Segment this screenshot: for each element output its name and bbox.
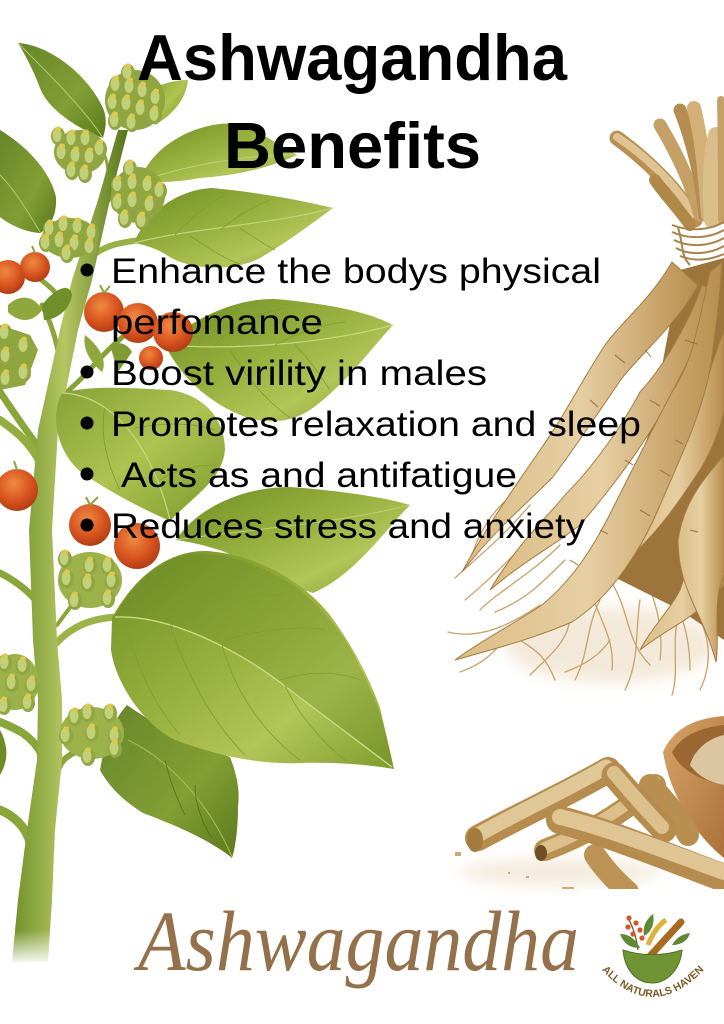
leaf: behind Benefits xyxy=(140,123,297,182)
flower cluster: middle xyxy=(58,549,122,610)
green buds below berries xyxy=(0,288,132,390)
logo icon: pestle xyxy=(650,922,681,956)
leaf: largest xyxy=(111,551,394,769)
leaf: far left xyxy=(0,130,56,233)
leaf: middle xyxy=(165,299,393,421)
logo icon: mortar bowl xyxy=(623,950,682,983)
logo icon: berries sprig xyxy=(620,914,690,950)
title xyxy=(137,21,568,182)
thin rootlets xyxy=(448,490,708,695)
flower cluster: centre xyxy=(111,159,167,230)
illustration: root bundle xyxy=(448,100,724,695)
leaf: bottom xyxy=(100,705,239,858)
white footer panel xyxy=(580,889,724,1024)
powder dust xyxy=(460,858,660,886)
stem branches xyxy=(0,145,145,842)
long roots xyxy=(455,262,724,662)
main stem xyxy=(12,130,128,962)
shaded gaps between roots xyxy=(600,258,724,640)
benefit 1: perfomance xyxy=(111,303,323,342)
title: Benefits xyxy=(224,109,481,182)
benefit 3: Promotes relaxation and sleep xyxy=(111,405,641,444)
leaf: left edge sliver xyxy=(0,730,6,775)
berries xyxy=(0,246,193,569)
root markings xyxy=(570,340,698,565)
flower cluster: bottom xyxy=(59,703,124,766)
root shadow on ground xyxy=(505,607,715,683)
flower cluster: top xyxy=(105,63,165,132)
leaf: upper large xyxy=(134,188,333,268)
leaf: lower left xyxy=(56,388,225,521)
wordmark: Ashwagandha script: Ashwagandha xyxy=(133,893,579,989)
benefits list xyxy=(80,252,641,546)
benefit 5: Reduces stress and anxiety xyxy=(111,507,586,546)
benefit 1 xyxy=(111,252,601,342)
root cut ends xyxy=(467,828,547,861)
logo: All Naturals Haven xyxy=(602,914,704,998)
illustration: cut roots and bowl xyxy=(455,716,724,892)
stem base fade xyxy=(8,930,54,965)
dust specks xyxy=(455,852,574,889)
wooden bowl xyxy=(663,716,724,858)
cut root sticks xyxy=(478,767,724,892)
benefit 1: Enhance the bodys physical xyxy=(111,252,601,291)
plant illustration xyxy=(0,43,410,965)
leaf: top right small xyxy=(146,80,188,125)
logo text: ALL NATURALS HAVEN xyxy=(602,965,704,998)
flower cluster: left upper xyxy=(51,126,107,183)
flower cluster: left lower xyxy=(0,653,39,715)
upper root stubs xyxy=(617,100,722,225)
flower cluster: lower upper xyxy=(39,215,99,263)
benefit 4: Acts as and antifatigue xyxy=(121,456,517,495)
twine xyxy=(672,222,724,265)
benefit 2: Boost virility in males xyxy=(111,354,487,393)
leaf: lower right xyxy=(176,487,410,593)
title: Ashwagandha xyxy=(137,21,568,94)
leaf: top left xyxy=(18,43,106,138)
bullet dots xyxy=(80,264,94,532)
